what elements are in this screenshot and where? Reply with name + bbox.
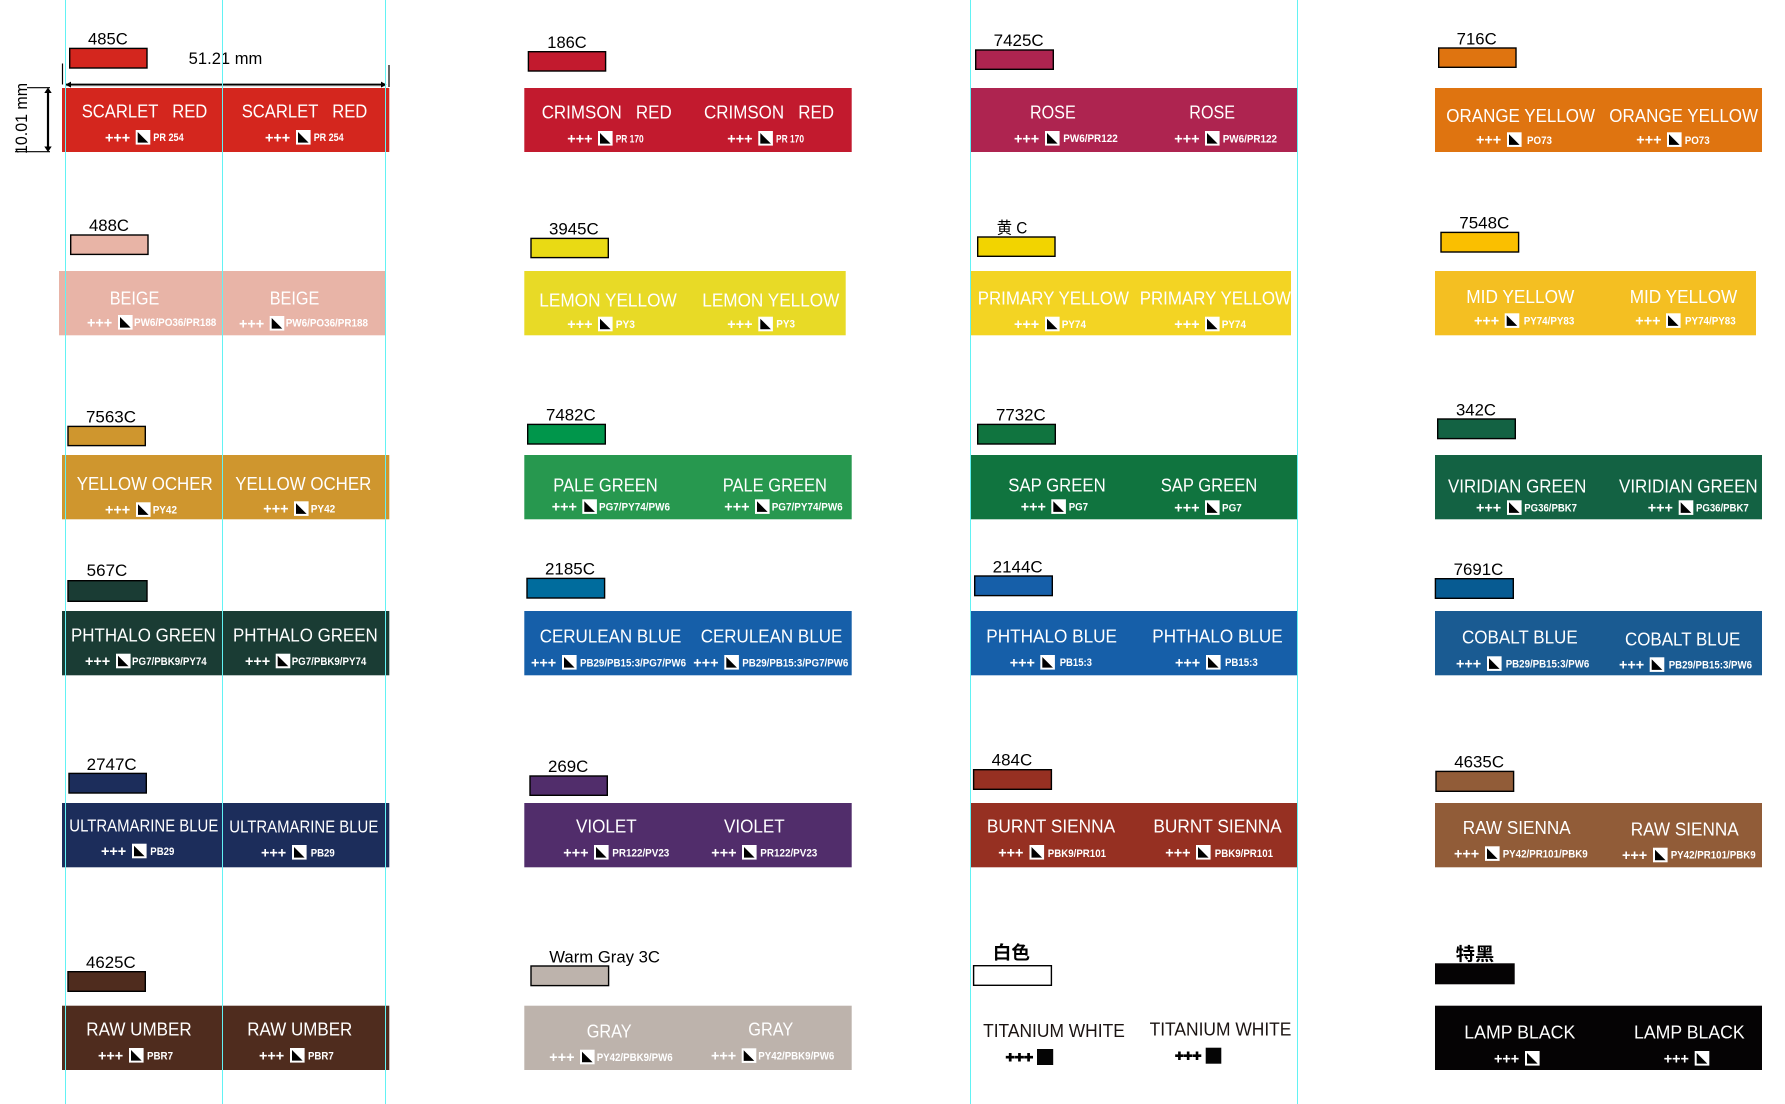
band label right <box>1174 101 1277 147</box>
band label right: PB29/PB15:3/PG7/PW6 <box>742 658 848 670</box>
band label right: +++ <box>693 655 719 671</box>
colour band <box>971 455 1297 519</box>
colour chip <box>528 52 606 71</box>
band label left: PR122/PV23 <box>612 847 669 859</box>
band label left <box>1014 101 1118 147</box>
panel: 488C beige <box>59 217 385 335</box>
panel: 2185C cerulean blue <box>524 561 852 675</box>
band label left <box>1008 474 1106 516</box>
colour chip <box>978 237 1055 256</box>
band label right: PB15:3 <box>1225 657 1258 669</box>
band label right: PR 254 <box>314 132 344 144</box>
band label left: +++ <box>567 317 593 333</box>
colour chip <box>68 972 145 991</box>
colour chip <box>974 966 1051 985</box>
band label right <box>233 624 378 670</box>
band label left: +++ <box>1006 1050 1033 1066</box>
panel: 7548C mid yellow <box>1435 215 1756 335</box>
band label left <box>87 288 216 331</box>
band label left: PHTHALO BLUE <box>986 626 1117 647</box>
band label right: +++ <box>1648 501 1673 517</box>
colour code: 2747C <box>87 756 137 774</box>
band label right: PHTHALO GREEN <box>233 624 378 645</box>
colour code: 3945C <box>549 221 599 239</box>
band label left: RAW SIENNA <box>1463 817 1571 838</box>
band label left: +++ <box>1010 655 1035 671</box>
band label left: PY74 <box>1062 319 1086 331</box>
panel: 716C orange yellow <box>1435 30 1762 152</box>
band label left: PBR7 <box>147 1050 173 1062</box>
band label right: PG36/PBK7 <box>1696 502 1749 514</box>
band label right <box>1609 106 1758 149</box>
colour code: 488C <box>89 217 129 235</box>
panel: white titanium white <box>974 943 1291 1066</box>
band label left: +++ <box>549 1050 575 1066</box>
band label right: PG7/PBK9/PY74 <box>292 656 366 668</box>
panel: 485C scarlet red <box>62 30 389 152</box>
band label right: ROSE <box>1189 101 1235 122</box>
band label right: PY74 <box>1222 319 1246 331</box>
band label left: CRIMSON RED <box>542 101 672 122</box>
colour chip <box>530 776 607 795</box>
band label left: +++ <box>531 655 556 671</box>
band label left: ORANGE YELLOW <box>1446 106 1595 126</box>
colour code: 黄 C <box>997 218 1027 237</box>
colour band <box>524 271 846 335</box>
panel: 2144C phthalo blue <box>971 558 1297 675</box>
band label right <box>711 816 817 861</box>
band label right <box>1619 475 1758 517</box>
panel: 269C violet <box>524 758 852 867</box>
band label left <box>563 816 669 861</box>
band label right: +++ <box>1635 314 1661 330</box>
band label right: +++ <box>265 130 290 146</box>
colour band <box>1435 271 1756 335</box>
band label right: +++ <box>1622 848 1647 864</box>
band label right: ORANGE YELLOW <box>1609 106 1758 126</box>
band label right <box>702 289 840 333</box>
band label left: PALE GREEN <box>553 474 658 495</box>
band label left: BEIGE <box>110 288 159 309</box>
colour band <box>524 1006 852 1070</box>
band label left: PY74/PY83 <box>1524 316 1574 328</box>
panel: yellow C primary yellow <box>971 218 1291 335</box>
band label right: COBALT BLUE <box>1625 628 1740 649</box>
band label left: +++ <box>1014 317 1039 333</box>
band label left: PB29/PB15:3/PG7/PW6 <box>580 658 686 670</box>
colour chip <box>975 576 1052 596</box>
band label left: PY3 <box>616 319 635 331</box>
band label left <box>1456 627 1589 673</box>
band label right: VIRIDIAN GREEN <box>1619 475 1758 496</box>
band label left <box>1448 475 1586 517</box>
colour band <box>62 803 389 867</box>
band label left: PW6/PO36/PR188 <box>134 317 216 329</box>
colour chip <box>71 235 148 254</box>
band label right: PY42 <box>311 504 335 516</box>
band label left: PG7/PBK9/PY74 <box>132 656 207 668</box>
width dimension annotation: 51.21 mm <box>189 50 262 68</box>
height dimension annotation: 10.01 mm <box>13 83 31 154</box>
colour chip <box>531 966 609 986</box>
band label left: PO73 <box>1527 135 1552 147</box>
band label right: PY74/PY83 <box>1685 316 1736 328</box>
band label right <box>239 288 368 332</box>
band label right <box>229 816 378 861</box>
band label left: +++ <box>1456 657 1481 673</box>
panel: special black lamp black <box>1435 945 1762 1070</box>
colour chip <box>531 238 608 258</box>
band label left: +++ <box>98 1048 123 1064</box>
panel: 7482C pale green <box>524 407 852 519</box>
colour chip <box>1438 419 1515 439</box>
band label right: +++ <box>1175 1049 1201 1065</box>
band label right: PALE GREEN <box>723 474 827 495</box>
band label left: CERULEAN BLUE <box>540 626 681 647</box>
band label left: COBALT BLUE <box>1462 627 1578 648</box>
band label right: +++ <box>1175 655 1200 671</box>
band label right: CERULEAN BLUE <box>701 626 842 647</box>
band label left: PY42/PR101/PBK9 <box>1503 848 1588 860</box>
colour band <box>524 455 852 519</box>
panel: 567C phthalo green <box>62 562 389 675</box>
band label right: CRIMSON RED <box>704 101 834 122</box>
band label left: +++ <box>105 503 130 519</box>
colour chip <box>1441 232 1519 252</box>
panel: Warm Gray 3C gray <box>524 948 852 1070</box>
panel: 7691C cobalt blue <box>1435 561 1762 675</box>
colour code: 716C <box>1457 30 1497 48</box>
band label right: PW6/PO36/PR188 <box>286 317 368 329</box>
height dimension annotation <box>13 83 52 154</box>
band label left <box>978 288 1129 333</box>
band label left: +++ <box>563 845 589 861</box>
colour code: 186C <box>547 34 587 52</box>
band label right <box>235 473 371 518</box>
band label right: +++ <box>727 131 753 147</box>
band label right: +++ <box>727 317 753 333</box>
band label left: +++ <box>105 130 130 146</box>
band label right: +++ <box>1174 317 1200 333</box>
band label left: PR 170 <box>616 133 644 145</box>
band label left: GRAY <box>587 1020 632 1041</box>
band label left: +++ <box>567 131 593 147</box>
panel: 186C crimson red <box>524 34 852 152</box>
band label left: +++ <box>101 844 126 860</box>
colour code: 342C <box>1456 401 1496 419</box>
band label left: PG7 <box>1069 501 1088 513</box>
band label right: RAW SIENNA <box>1631 818 1739 839</box>
panel: 342C viridian green <box>1435 401 1762 519</box>
band label left <box>86 1019 192 1064</box>
band label left <box>1466 286 1575 330</box>
colour band <box>524 611 852 675</box>
colour code: 7691C <box>1454 561 1503 579</box>
colour chip <box>70 48 147 68</box>
band label left: +++ <box>1476 501 1501 517</box>
colour code: 2144C <box>993 558 1043 576</box>
band label right: +++ <box>259 1048 284 1064</box>
colour band <box>971 271 1291 335</box>
colour band <box>1435 803 1762 867</box>
band label right: GRAY <box>748 1019 793 1040</box>
colour band <box>62 88 389 152</box>
colour code: Warm Gray 3C <box>549 948 660 966</box>
panel: 7732C sap green <box>971 407 1297 519</box>
band label left: PB29 <box>150 846 174 858</box>
band label right: +++ <box>261 845 286 861</box>
colour band <box>1435 1006 1762 1070</box>
band label left: +++ <box>998 845 1023 861</box>
band label right <box>1150 1019 1291 1065</box>
band label right: PO73 <box>1685 135 1710 147</box>
band label right: SAP GREEN <box>1161 474 1257 495</box>
band label left <box>549 1020 673 1066</box>
colour code: 269C <box>548 758 588 776</box>
band label right <box>1630 286 1738 330</box>
colour chip <box>1435 579 1513 598</box>
colour band <box>62 455 389 519</box>
band label right <box>704 101 834 147</box>
band label right: +++ <box>1165 845 1191 861</box>
band label left: PR 254 <box>153 132 184 144</box>
band label right: PR122/PV23 <box>760 847 817 859</box>
band label right: YELLOW OCHER <box>235 473 371 494</box>
band label right: +++ <box>245 654 270 670</box>
band label left <box>552 474 670 516</box>
colour chip <box>978 424 1055 444</box>
band label left: +++ <box>1474 314 1499 330</box>
band label right <box>247 1019 352 1064</box>
colour band <box>62 1006 389 1070</box>
band label right: PRIMARY YELLOW <box>1140 288 1291 309</box>
band label left: SAP GREEN <box>1008 474 1106 495</box>
band label left <box>987 816 1116 861</box>
band label left: PB15:3 <box>1060 657 1092 669</box>
band label left: +++ <box>87 315 112 331</box>
colour code: 2185C <box>545 561 595 579</box>
colour code: 484C <box>992 751 1032 769</box>
band label right <box>723 474 843 516</box>
band label right: RAW UMBER <box>247 1019 352 1040</box>
colour code: 白色 <box>993 943 1030 963</box>
band label left: PY42 <box>153 505 177 517</box>
band label right: PY42/PBK9/PW6 <box>758 1051 834 1063</box>
colour chip <box>976 50 1053 69</box>
band label left <box>82 100 207 146</box>
band label right <box>1622 818 1756 864</box>
band label left: +++ <box>1476 133 1501 149</box>
band label right: +++ <box>1174 131 1200 147</box>
band label left <box>983 1020 1125 1066</box>
band label left <box>77 473 213 519</box>
band label left <box>1454 817 1588 863</box>
band label right: ULTRAMARINE BLUE <box>229 816 378 836</box>
band label right <box>1634 1022 1745 1067</box>
band label right: PY42/PR101/PBK9 <box>1671 850 1756 862</box>
colour code: 7548C <box>1459 215 1509 233</box>
band label right: PBK9/PR101 <box>1215 848 1273 860</box>
band label left: PRIMARY YELLOW <box>978 288 1129 309</box>
band label right: PHTHALO BLUE <box>1152 626 1283 647</box>
band label right: PBR7 <box>308 1050 334 1062</box>
band label left <box>531 626 686 671</box>
colour chip <box>1436 771 1514 791</box>
band label left: +++ <box>1014 131 1039 147</box>
band label right <box>1153 816 1282 861</box>
band label left: LEMON YELLOW <box>539 289 677 310</box>
band label right: VIOLET <box>724 816 785 837</box>
band label left <box>69 815 218 860</box>
band label right: LEMON YELLOW <box>702 289 840 310</box>
band label right: PW6/PR122 <box>1223 133 1277 145</box>
colour chip <box>528 424 605 444</box>
colour band <box>59 271 385 335</box>
band label left <box>1446 106 1595 149</box>
band label left: +++ <box>1021 500 1046 516</box>
band label right: PB29 <box>311 847 335 859</box>
band label right <box>711 1019 834 1065</box>
band label left: BURNT SIENNA <box>987 816 1116 837</box>
band label left: PW6/PR122 <box>1063 133 1118 145</box>
band label right <box>1152 626 1283 671</box>
colour band <box>62 611 389 675</box>
band label right: +++ <box>1636 133 1662 149</box>
band label right <box>693 626 848 671</box>
colour chip <box>68 426 145 446</box>
band label right: +++ <box>263 502 289 518</box>
band label left: YELLOW OCHER <box>77 473 213 494</box>
colour band <box>971 803 1297 867</box>
band label left <box>986 626 1117 671</box>
colour code: 7425C <box>994 32 1044 50</box>
band label left: PB29/PB15:3/PW6 <box>1506 659 1589 671</box>
colour band <box>1435 611 1762 675</box>
colour band <box>971 88 1297 152</box>
colour band <box>524 88 852 152</box>
band label left: TITANIUM WHITE <box>983 1020 1125 1041</box>
band label left <box>542 101 672 147</box>
colour code: 485C <box>88 30 128 48</box>
band label right: TITANIUM WHITE <box>1150 1019 1291 1040</box>
panel: 4635C raw sienna <box>1435 754 1762 867</box>
colour code: 4625C <box>86 954 136 972</box>
colour code: 7732C <box>996 407 1046 425</box>
band label right <box>1161 474 1257 517</box>
colour chip <box>1439 48 1516 67</box>
band label left: VIRIDIAN GREEN <box>1448 475 1586 496</box>
band label right: BEIGE <box>270 288 319 309</box>
band label right: PB29/PB15:3/PW6 <box>1669 660 1752 672</box>
band label left <box>71 624 216 670</box>
band label left: PHTHALO GREEN <box>71 624 216 645</box>
panel: 4625C raw umber <box>62 954 389 1070</box>
colour code: 4635C <box>1454 754 1504 772</box>
colour chip <box>974 770 1051 789</box>
band label right: PG7 <box>1222 502 1242 514</box>
band label right: BURNT SIENNA <box>1153 816 1282 837</box>
panel: 2747C ultramarine blue <box>62 756 389 867</box>
band label left: PG7/PY74/PW6 <box>599 502 670 514</box>
colour code: 567C <box>87 562 127 580</box>
band label left <box>539 289 677 333</box>
band label right: +++ <box>1664 1051 1689 1067</box>
band label right: SCARLET RED <box>242 100 367 121</box>
panel: 7563C yellow ocher <box>62 408 389 519</box>
band label left: MID YELLOW <box>1466 286 1575 307</box>
colour chip <box>69 773 146 793</box>
band label right: PY3 <box>776 318 795 330</box>
colour code: 7482C <box>546 407 596 425</box>
band label left: LAMP BLACK <box>1464 1022 1576 1043</box>
band label right: MID YELLOW <box>1630 286 1738 307</box>
band label right <box>1619 628 1752 674</box>
band label right: +++ <box>711 1049 736 1065</box>
band label left: +++ <box>552 500 577 516</box>
colour band <box>524 803 852 867</box>
colour band <box>1435 455 1762 519</box>
band label right: LAMP BLACK <box>1634 1022 1745 1043</box>
band label left <box>1464 1022 1576 1067</box>
band label right: PR 170 <box>776 133 804 145</box>
colour code: 特黑 <box>1456 945 1494 965</box>
band label right <box>1140 288 1291 333</box>
band label right: +++ <box>711 845 737 861</box>
band label right: PG7/PY74/PW6 <box>772 502 843 514</box>
band label left: ULTRAMARINE BLUE <box>69 815 218 835</box>
band label right <box>242 100 367 146</box>
colour band <box>1435 88 1762 152</box>
panel: 3945C lemon yellow <box>524 221 846 335</box>
colour band <box>971 611 1297 675</box>
band label left: ROSE <box>1030 101 1076 122</box>
band label right: +++ <box>1174 501 1200 517</box>
band label left: PBK9/PR101 <box>1048 848 1106 860</box>
colour chip <box>68 581 147 601</box>
band label left: +++ <box>1454 847 1479 863</box>
band label right: +++ <box>724 500 750 516</box>
band label right: +++ <box>1619 658 1644 674</box>
band label left: VIOLET <box>576 816 637 837</box>
band label left: PY42/PBK9/PW6 <box>597 1052 673 1064</box>
band label right: +++ <box>239 316 264 332</box>
band label left: PG36/PBK7 <box>1524 502 1577 514</box>
band label left: +++ <box>85 654 110 670</box>
colour chip <box>527 578 605 598</box>
colour chip <box>1435 963 1515 984</box>
width dimension annotation <box>62 50 389 88</box>
panel: 7425C rose <box>971 32 1297 152</box>
colour code: 7563C <box>86 408 136 426</box>
panel: 484C burnt sienna <box>971 751 1297 867</box>
layout guide lines <box>66 0 1298 1104</box>
band label left: RAW UMBER <box>86 1019 192 1040</box>
band label left: +++ <box>1494 1051 1519 1067</box>
band label left: SCARLET RED <box>82 100 207 121</box>
